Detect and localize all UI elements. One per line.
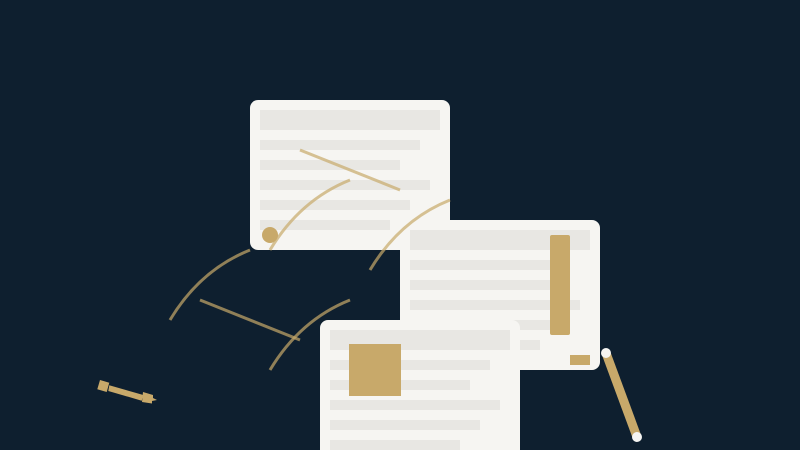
icon: pen <box>601 348 642 442</box>
icon: stylus arrow <box>97 380 157 404</box>
panel: document card top <box>250 100 450 250</box>
panel: document card right <box>400 220 600 370</box>
panel: document card bottom <box>320 320 520 450</box>
connector lines <box>170 150 450 370</box>
